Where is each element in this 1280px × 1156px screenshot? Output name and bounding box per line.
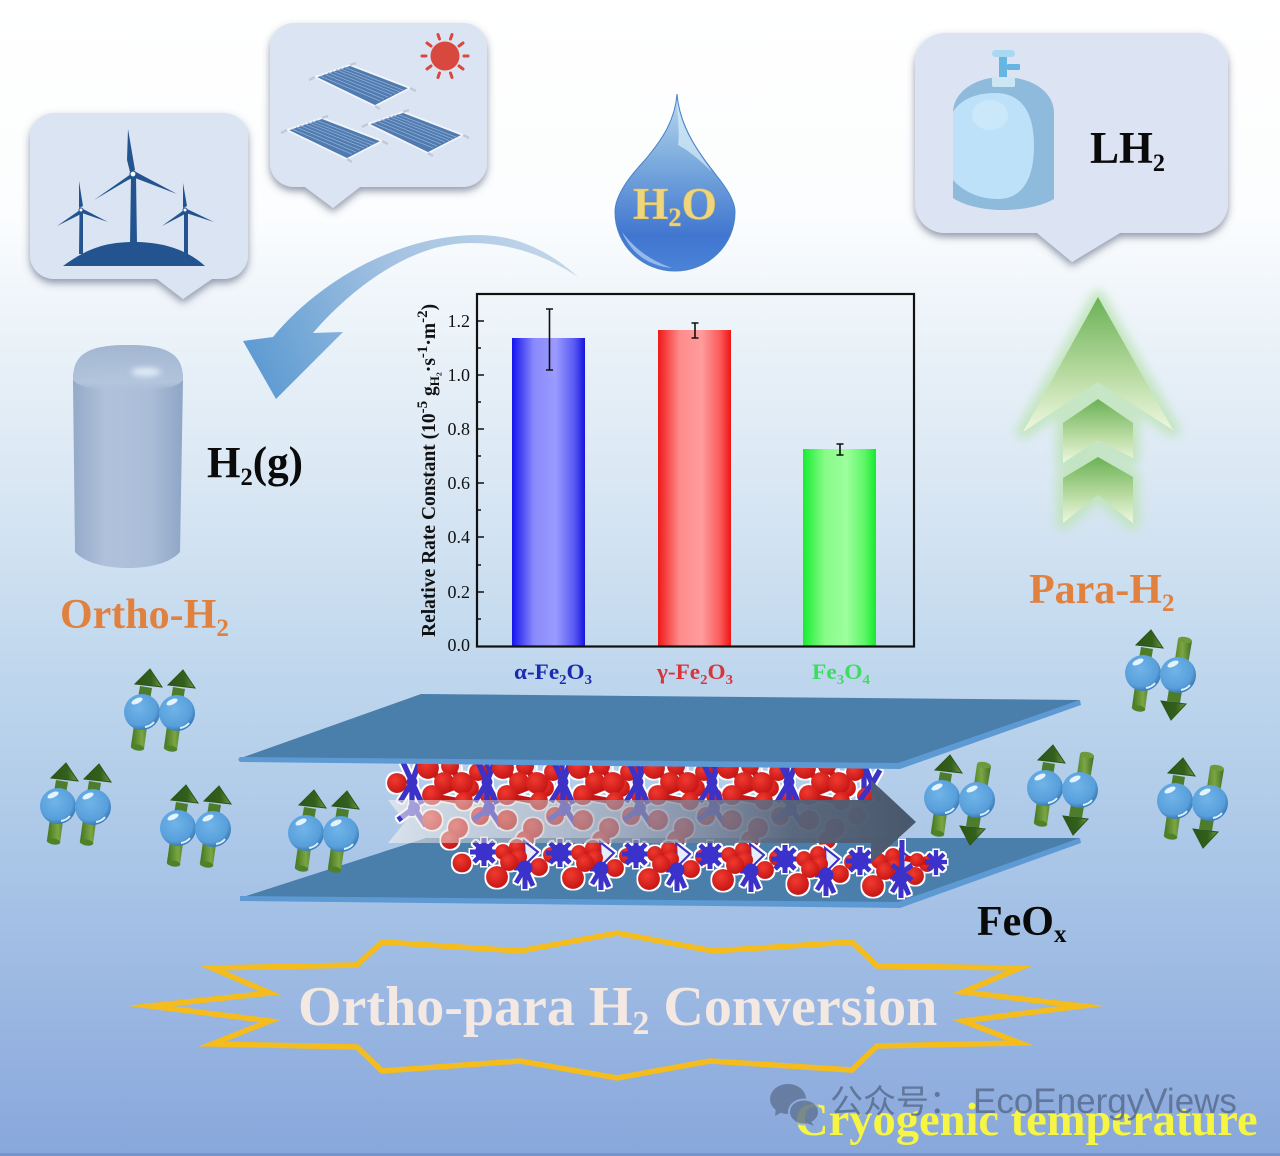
icon: wechat [770,1084,819,1126]
label: H2O: 2 [668,203,682,232]
y axis title: H₂ [427,372,442,386]
category labels: 2 [700,673,708,688]
icon: wind turbines [57,129,214,266]
icon: solar panels [281,63,469,162]
molecules: para hydrogen [924,630,1228,848]
watermark [770,1082,1237,1126]
arrow: curved, water to hydrogen [243,235,578,399]
text: account name: EcoEnergyViews [973,1082,1237,1121]
lattice: lower layer [452,838,947,898]
label: H2(g): 2 [241,464,253,491]
bar: gamma-Fe2O3 [658,330,731,646]
icon: sun [422,34,468,78]
label: Para-H2: Para-H [1029,567,1162,613]
y axis tick labels: 0.4 [448,527,470,547]
category labels: γ-Fe [657,659,698,684]
error bars [546,309,844,455]
label: Ortho-H2: 2 [216,615,229,642]
category labels: O [844,659,863,684]
y axis title: -1 [415,346,431,358]
category labels: α-Fe [514,659,557,684]
text: account name: 公众号： [830,1083,962,1120]
icon: hydrogen gas cylinder [73,345,183,568]
y axis title: -2 [415,310,431,323]
y axis title: -5 [415,401,431,413]
category labels: 2 [559,673,567,688]
icon: hydrogen tank [953,50,1054,210]
category labels: O [708,659,726,684]
category labels: 4 [863,673,870,688]
y axis tick labels: 0.0 [448,635,470,655]
label: LH2: 2 [1153,150,1165,177]
icon: water drop [615,94,735,271]
category labels: 3 [837,673,844,688]
molecules: ortho hydrogen [40,669,359,874]
label: FeOx: FeO [977,899,1054,945]
y axis tick labels: 1.2 [448,311,470,331]
arrow: glowing green up arrow [1023,297,1173,523]
y axis tick labels: 1.0 [448,365,470,385]
y axis tick labels: 0.6 [448,473,470,493]
title: ortho-para conversion: 2 [632,1005,649,1042]
callout: wind power [30,113,248,299]
y axis title: g [419,386,440,401]
y axis title: ·s [419,358,440,372]
y axis tick labels: 0.2 [448,582,470,602]
label: H2(g): (g) [253,438,303,487]
axes frame [477,294,914,646]
category labels: O [567,659,585,684]
category labels: 3 [585,673,592,688]
starburst frame [150,933,1082,1078]
label: H2(g): H [207,438,241,487]
label: LH2: LH [1090,123,1155,173]
y axis tick labels [448,311,470,655]
callout: liquid hydrogen [915,33,1228,262]
label: Ortho-H2: Ortho-H [60,592,216,638]
category labels [514,659,870,688]
crystal lattice: FeOx layers [387,757,947,898]
category labels: 3 [726,673,733,688]
label: H2O: H [633,179,668,229]
callout: solar power [270,23,487,208]
y axis tick labels: 0.8 [448,419,470,439]
y axis title: Relative Rate Constant (10 [419,413,440,637]
y axis title: ·m [419,323,440,346]
bar: alpha-Fe2O3 [512,338,585,646]
y axis title: ) [419,304,440,310]
arrow: translucent conversion arrow [388,780,916,863]
catalyst: lower plate [240,838,1081,908]
bar: Fe3O4 [803,449,876,646]
label: cryogenic temperature: Cryogenic temperature [795,1095,1258,1146]
lattice: upper layer [387,757,880,849]
catalyst: upper plate [238,694,1081,769]
label: H2O: O [682,179,717,229]
title: ortho-para conversion: Conversion [649,976,937,1038]
label: FeOx: x [1054,921,1067,948]
bar chart: relative rate constant [415,294,914,688]
label: Para-H2: 2 [1162,590,1174,617]
category labels: Fe [812,659,835,684]
title: ortho-para conversion: Ortho-para H [298,976,632,1038]
